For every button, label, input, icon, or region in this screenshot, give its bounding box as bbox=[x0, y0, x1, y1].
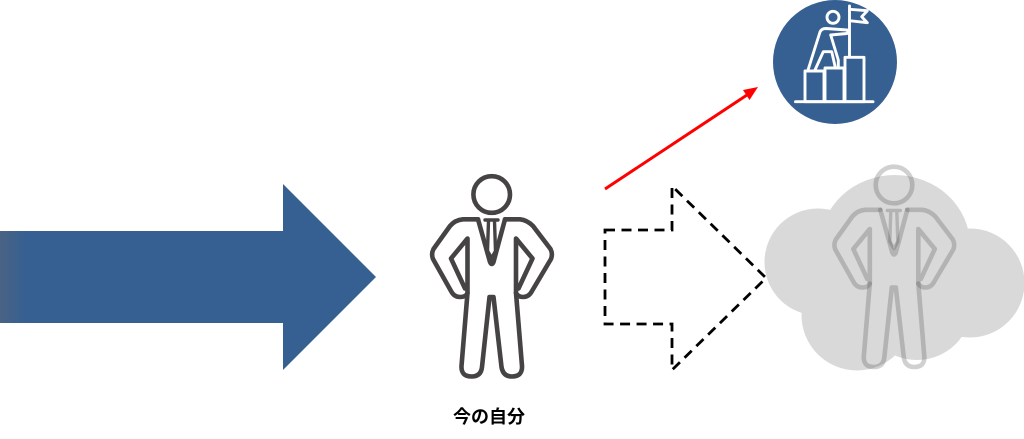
cloud bbox=[764, 175, 1024, 370]
red arrow bbox=[605, 87, 758, 189]
label: current self: 今の自分 bbox=[453, 406, 525, 427]
person: current self bbox=[432, 176, 552, 376]
ghost person: future self bbox=[834, 167, 954, 367]
dashed outline arrow bbox=[605, 186, 766, 370]
icon: goal badge with climber and flag bbox=[773, 0, 897, 124]
large blue arrow bbox=[0, 184, 376, 370]
